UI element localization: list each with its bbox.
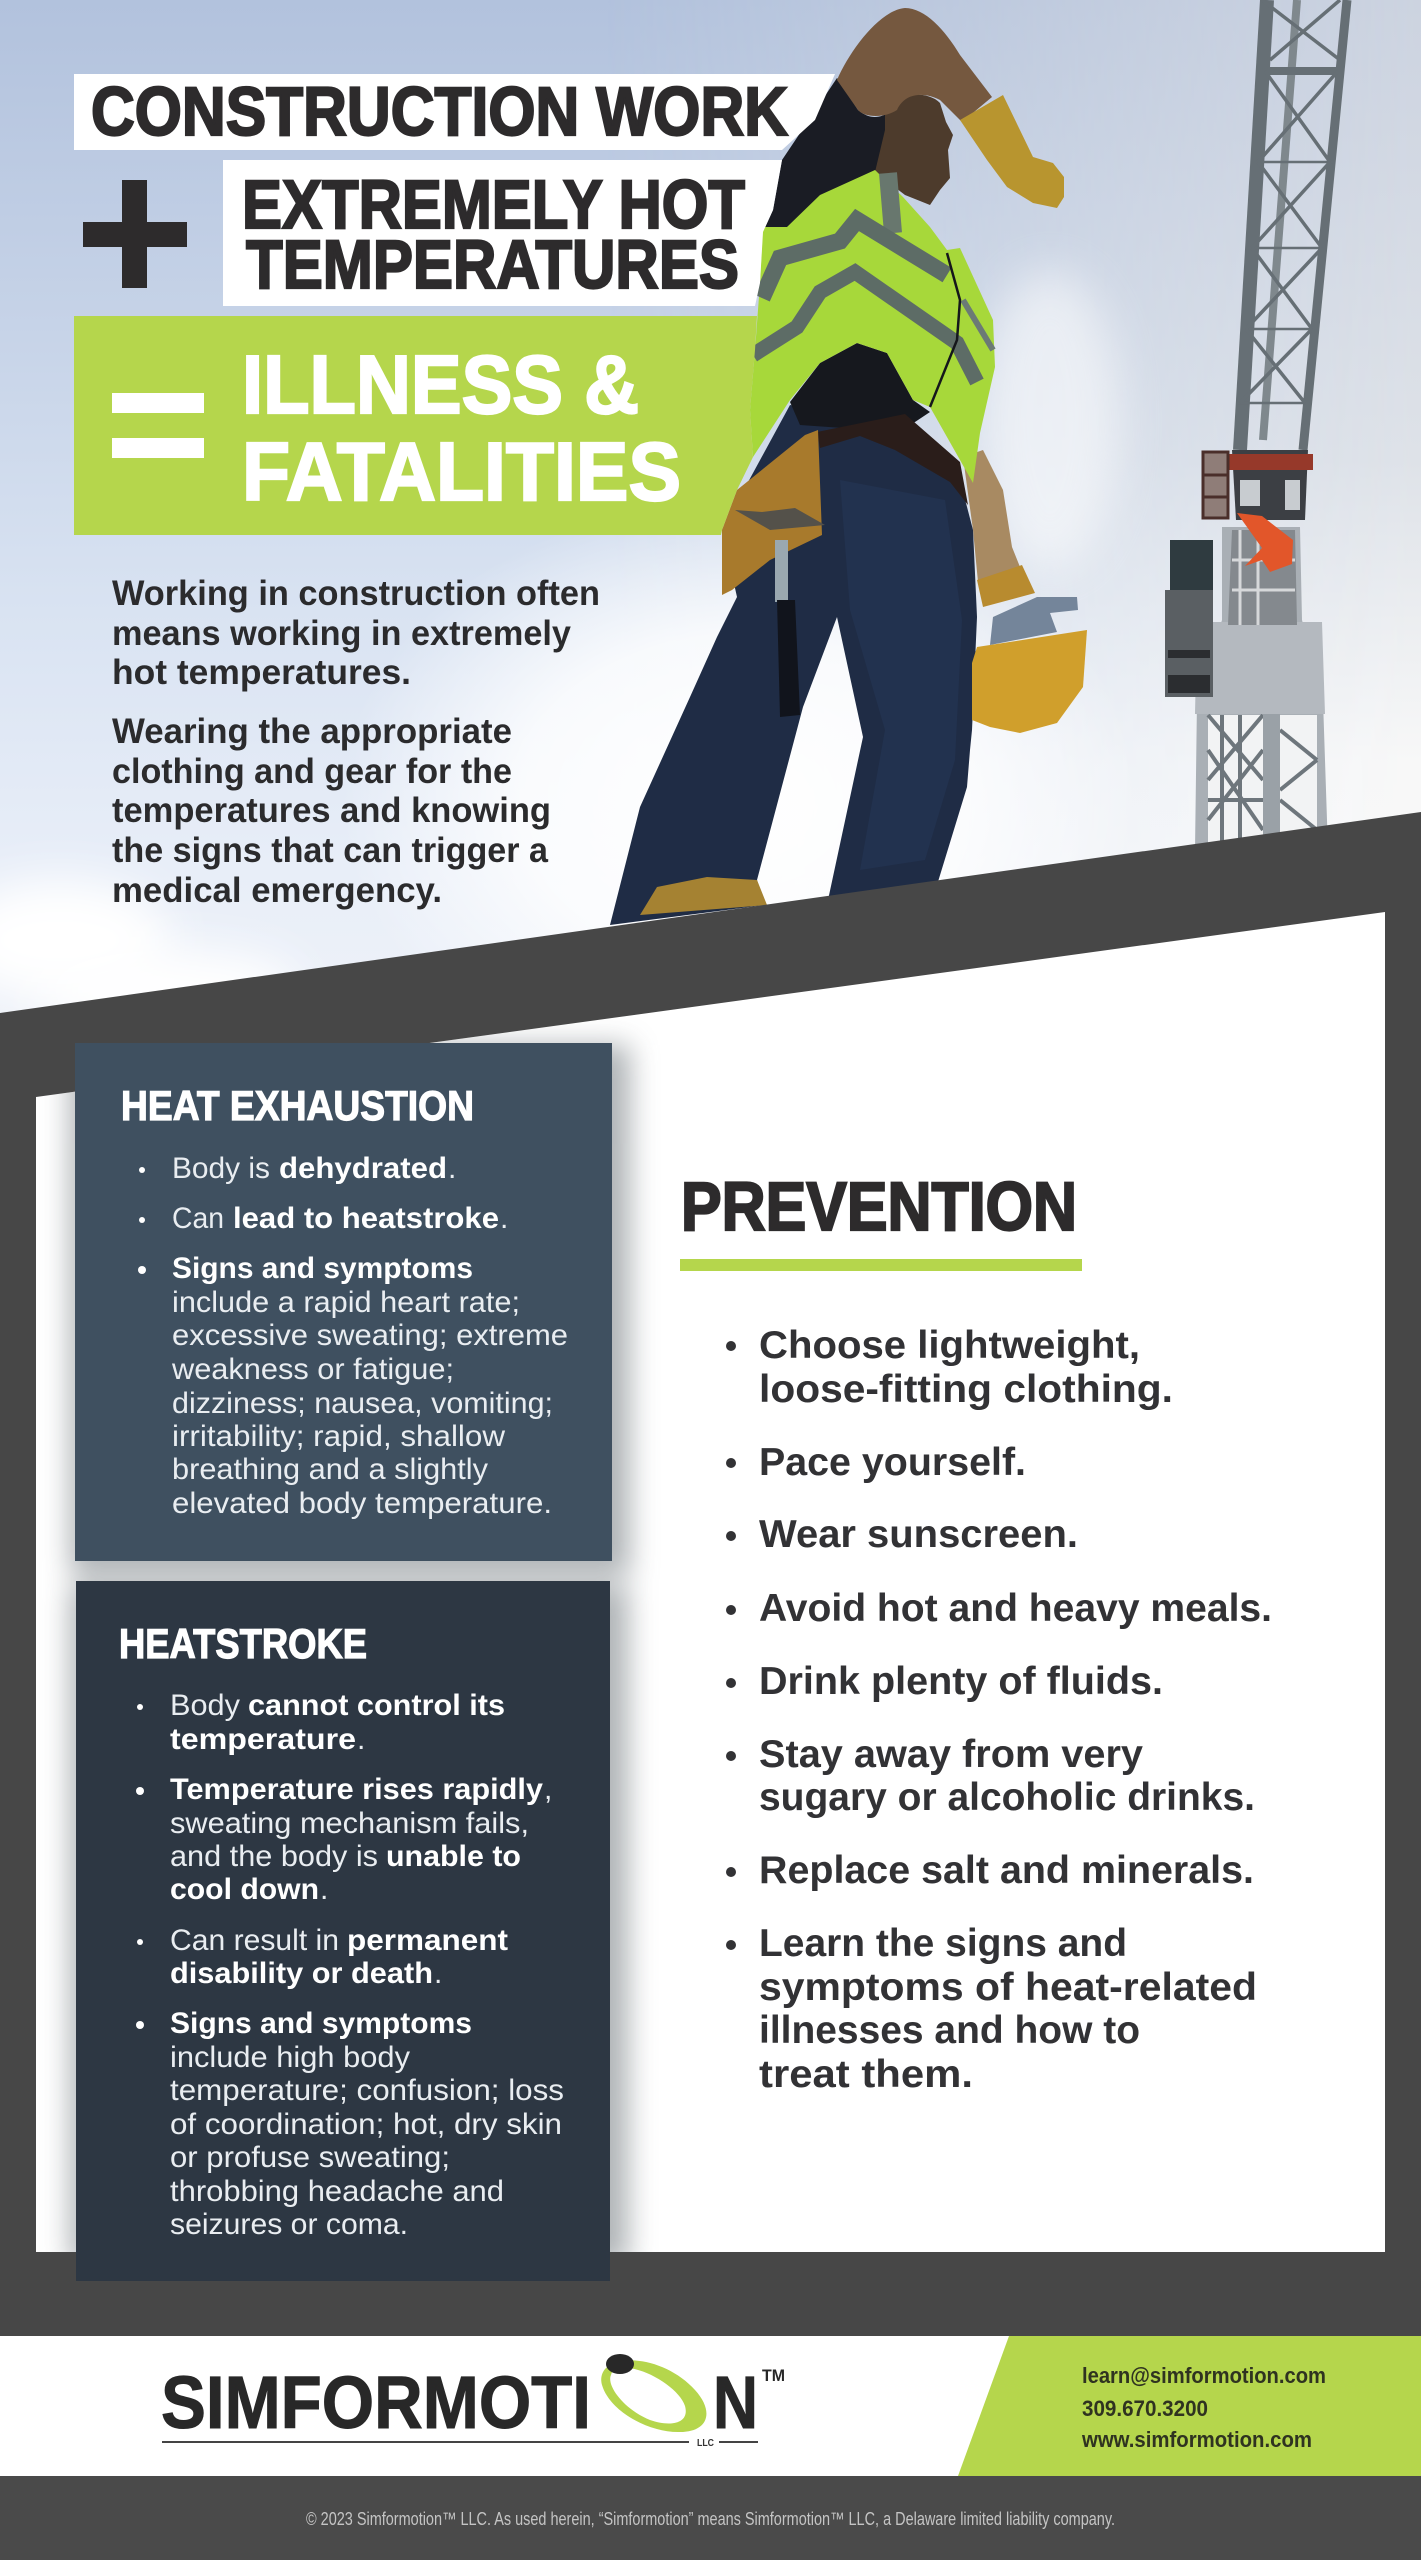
list text: . [357, 1723, 365, 1756]
list text: or profuse sweating; [170, 2141, 450, 2174]
heading: HEAT EXHAUSTION [121, 1082, 474, 1129]
intro text: Wearing the appropriate [112, 712, 512, 751]
footer: white logo strip [0, 2336, 1421, 2476]
panel: heatstroke [76, 1581, 610, 2281]
list text [170, 1689, 564, 2241]
list text: Pace yourself. [759, 1441, 1026, 1484]
list text: permanent [347, 1924, 508, 1957]
list text: sweating mechanism fails, [170, 1807, 529, 1840]
footer: green contact block: learn@simformotion.com [1082, 2363, 1326, 2388]
list text: Body [170, 1689, 240, 1722]
face [875, 94, 953, 205]
heading: extremely hot temperatures: TEMPERATURES [246, 226, 739, 303]
logo swoosh ring [601, 2360, 706, 2432]
footer: copyright bar [0, 2476, 1421, 2560]
list text: Wear sunscreen. [759, 1513, 1078, 1556]
panel: prevention [680, 1168, 1272, 2096]
hammer [735, 508, 825, 717]
footer: green contact block: www.simformotion.com [1081, 2427, 1312, 2452]
list text: symptoms of heat-related [759, 1966, 1257, 2009]
list text: weakness or fatigue; [171, 1353, 454, 1386]
list text: . [320, 1873, 328, 1906]
list text: . [434, 1957, 442, 1990]
right leg highlight [840, 480, 962, 870]
list text: throbbing headache and [170, 2175, 504, 2208]
list text: dehydrated [279, 1152, 447, 1185]
list text: cool down [170, 1873, 319, 1906]
heading: illness and fatalities: FATALITIES [242, 425, 681, 518]
worker figure [610, 8, 1087, 925]
list text: excessive sweating; extreme [172, 1319, 568, 1352]
logo: Simformotion: SIMFORMOTI [161, 2361, 591, 2444]
heading: construction work: CONSTRUCTION WORK [91, 73, 788, 150]
logo: Simformotion: LLC [697, 2438, 714, 2449]
list text: irritability; rapid, shallow [172, 1420, 505, 1453]
list text: Drink plenty of fluids. [759, 1660, 1163, 1703]
glove cuff [977, 565, 1035, 607]
crane slewing unit with red platform [1232, 450, 1308, 520]
list text: disability or death [170, 1957, 433, 1990]
black shirt and sleeve [763, 78, 895, 240]
list text: Stay away from very [759, 1733, 1143, 1776]
green underline [680, 1259, 1082, 1271]
list text: of coordination; hot, dry skin [170, 2108, 562, 2141]
intro text [112, 574, 600, 910]
list text: loose-fitting clothing. [759, 1368, 1173, 1411]
list text: breathing and a slightly [172, 1453, 488, 1486]
heading: extremely hot temperatures [223, 160, 782, 306]
list text [171, 1152, 568, 1520]
list text [759, 1324, 1272, 2096]
footer: copyright bar: © 2023 Simformotion™ LLC. As used herein, “Simformotion” means Simformotion™ LLC, a Delaware limited liability company. [306, 2509, 1115, 2529]
list text: unable to [386, 1840, 521, 1873]
intro text: clothing and gear for the [112, 752, 512, 791]
list text: Can result in [170, 1924, 339, 1957]
list text: Choose lightweight, [759, 1324, 1140, 1367]
heading: illness and fatalities [74, 316, 757, 535]
logo: Simformotion: N [713, 2361, 758, 2444]
list text: include a rapid heart rate; [172, 1286, 520, 1319]
intro text: hot temperatures. [112, 653, 411, 692]
intro text: the signs that can trigger a [112, 831, 549, 870]
list text: Body is [172, 1152, 270, 1185]
list text: dizziness; nausea, vomiting; [172, 1387, 553, 1420]
logo dot [606, 2354, 634, 2374]
crane [1165, 0, 1347, 850]
glove on raised hand [960, 95, 1064, 208]
panel: heat exhaustion [75, 1043, 612, 1561]
intro text: means working in extremely [112, 614, 572, 653]
hand and strap [990, 597, 1078, 645]
crane tower [1195, 527, 1328, 850]
bullets [136, 1704, 144, 2029]
list text: Signs and symptoms [172, 1252, 473, 1285]
boot [640, 877, 767, 915]
icon: plus [83, 180, 187, 288]
list text: sugary or alcoholic drinks. [759, 1776, 1255, 1819]
intro text: temperatures and knowing [112, 791, 551, 830]
crane cab [1170, 540, 1213, 590]
list text: . [448, 1152, 456, 1185]
bullets [726, 1341, 736, 1950]
heading: illness and fatalities: ILLNESS & [242, 338, 639, 431]
list text: treat them. [759, 2053, 973, 2096]
footer: green contact block: 309.670.3200 [1082, 2396, 1208, 2421]
jeans [610, 405, 977, 925]
list text: Signs and symptoms [170, 2007, 472, 2040]
list text: Avoid hot and heavy meals. [759, 1587, 1272, 1630]
intro text: Working in construction often [112, 574, 600, 613]
dark angled band [0, 812, 1421, 2560]
heading: PREVENTION [681, 1168, 1077, 1245]
list text: and the body is [170, 1840, 378, 1873]
heading: extremely hot temperatures: EXTREMELY HOT [242, 166, 745, 243]
dark shirt under vest [790, 343, 930, 432]
list text: . [500, 1202, 508, 1235]
crane boom lattice [1238, 0, 1347, 450]
list text: lead to heatstroke [233, 1202, 499, 1235]
footer: green contact block [958, 2336, 1421, 2476]
heading: HEATSTROKE [119, 1620, 367, 1667]
photo background: sky [0, 0, 1421, 1100]
list text: Learn the signs and [759, 1922, 1127, 1965]
logo: Simformotion: TM [762, 2366, 785, 2385]
list text: include high body [170, 2041, 410, 2074]
crane orange part [1237, 513, 1293, 572]
list text: temperature; confusion; loss [170, 2074, 564, 2107]
list text: Replace salt and minerals. [759, 1849, 1254, 1892]
list text: illnesses and how to [759, 2009, 1140, 2052]
right arm [963, 450, 1020, 582]
panel: white content area [36, 912, 1385, 2252]
list text: cannot control its [248, 1689, 505, 1722]
panel shadows [70, 1045, 630, 2265]
tool pouch [722, 430, 822, 595]
list text: elevated body temperature. [172, 1487, 552, 1520]
belt [817, 414, 968, 505]
list text: temperature [170, 1723, 356, 1756]
list text: , [544, 1773, 552, 1806]
list text: Temperature rises rapidly [170, 1773, 543, 1806]
intro text: medical emergency. [112, 871, 442, 910]
skin arm [837, 8, 992, 122]
bullets [138, 1167, 146, 1274]
list text: seizures or coma. [170, 2208, 408, 2241]
safety vest [750, 170, 995, 483]
icon: equals [112, 393, 204, 458]
logo: Simformotion [161, 2354, 785, 2449]
list text: Can [172, 1202, 224, 1235]
hard hat [972, 630, 1087, 733]
